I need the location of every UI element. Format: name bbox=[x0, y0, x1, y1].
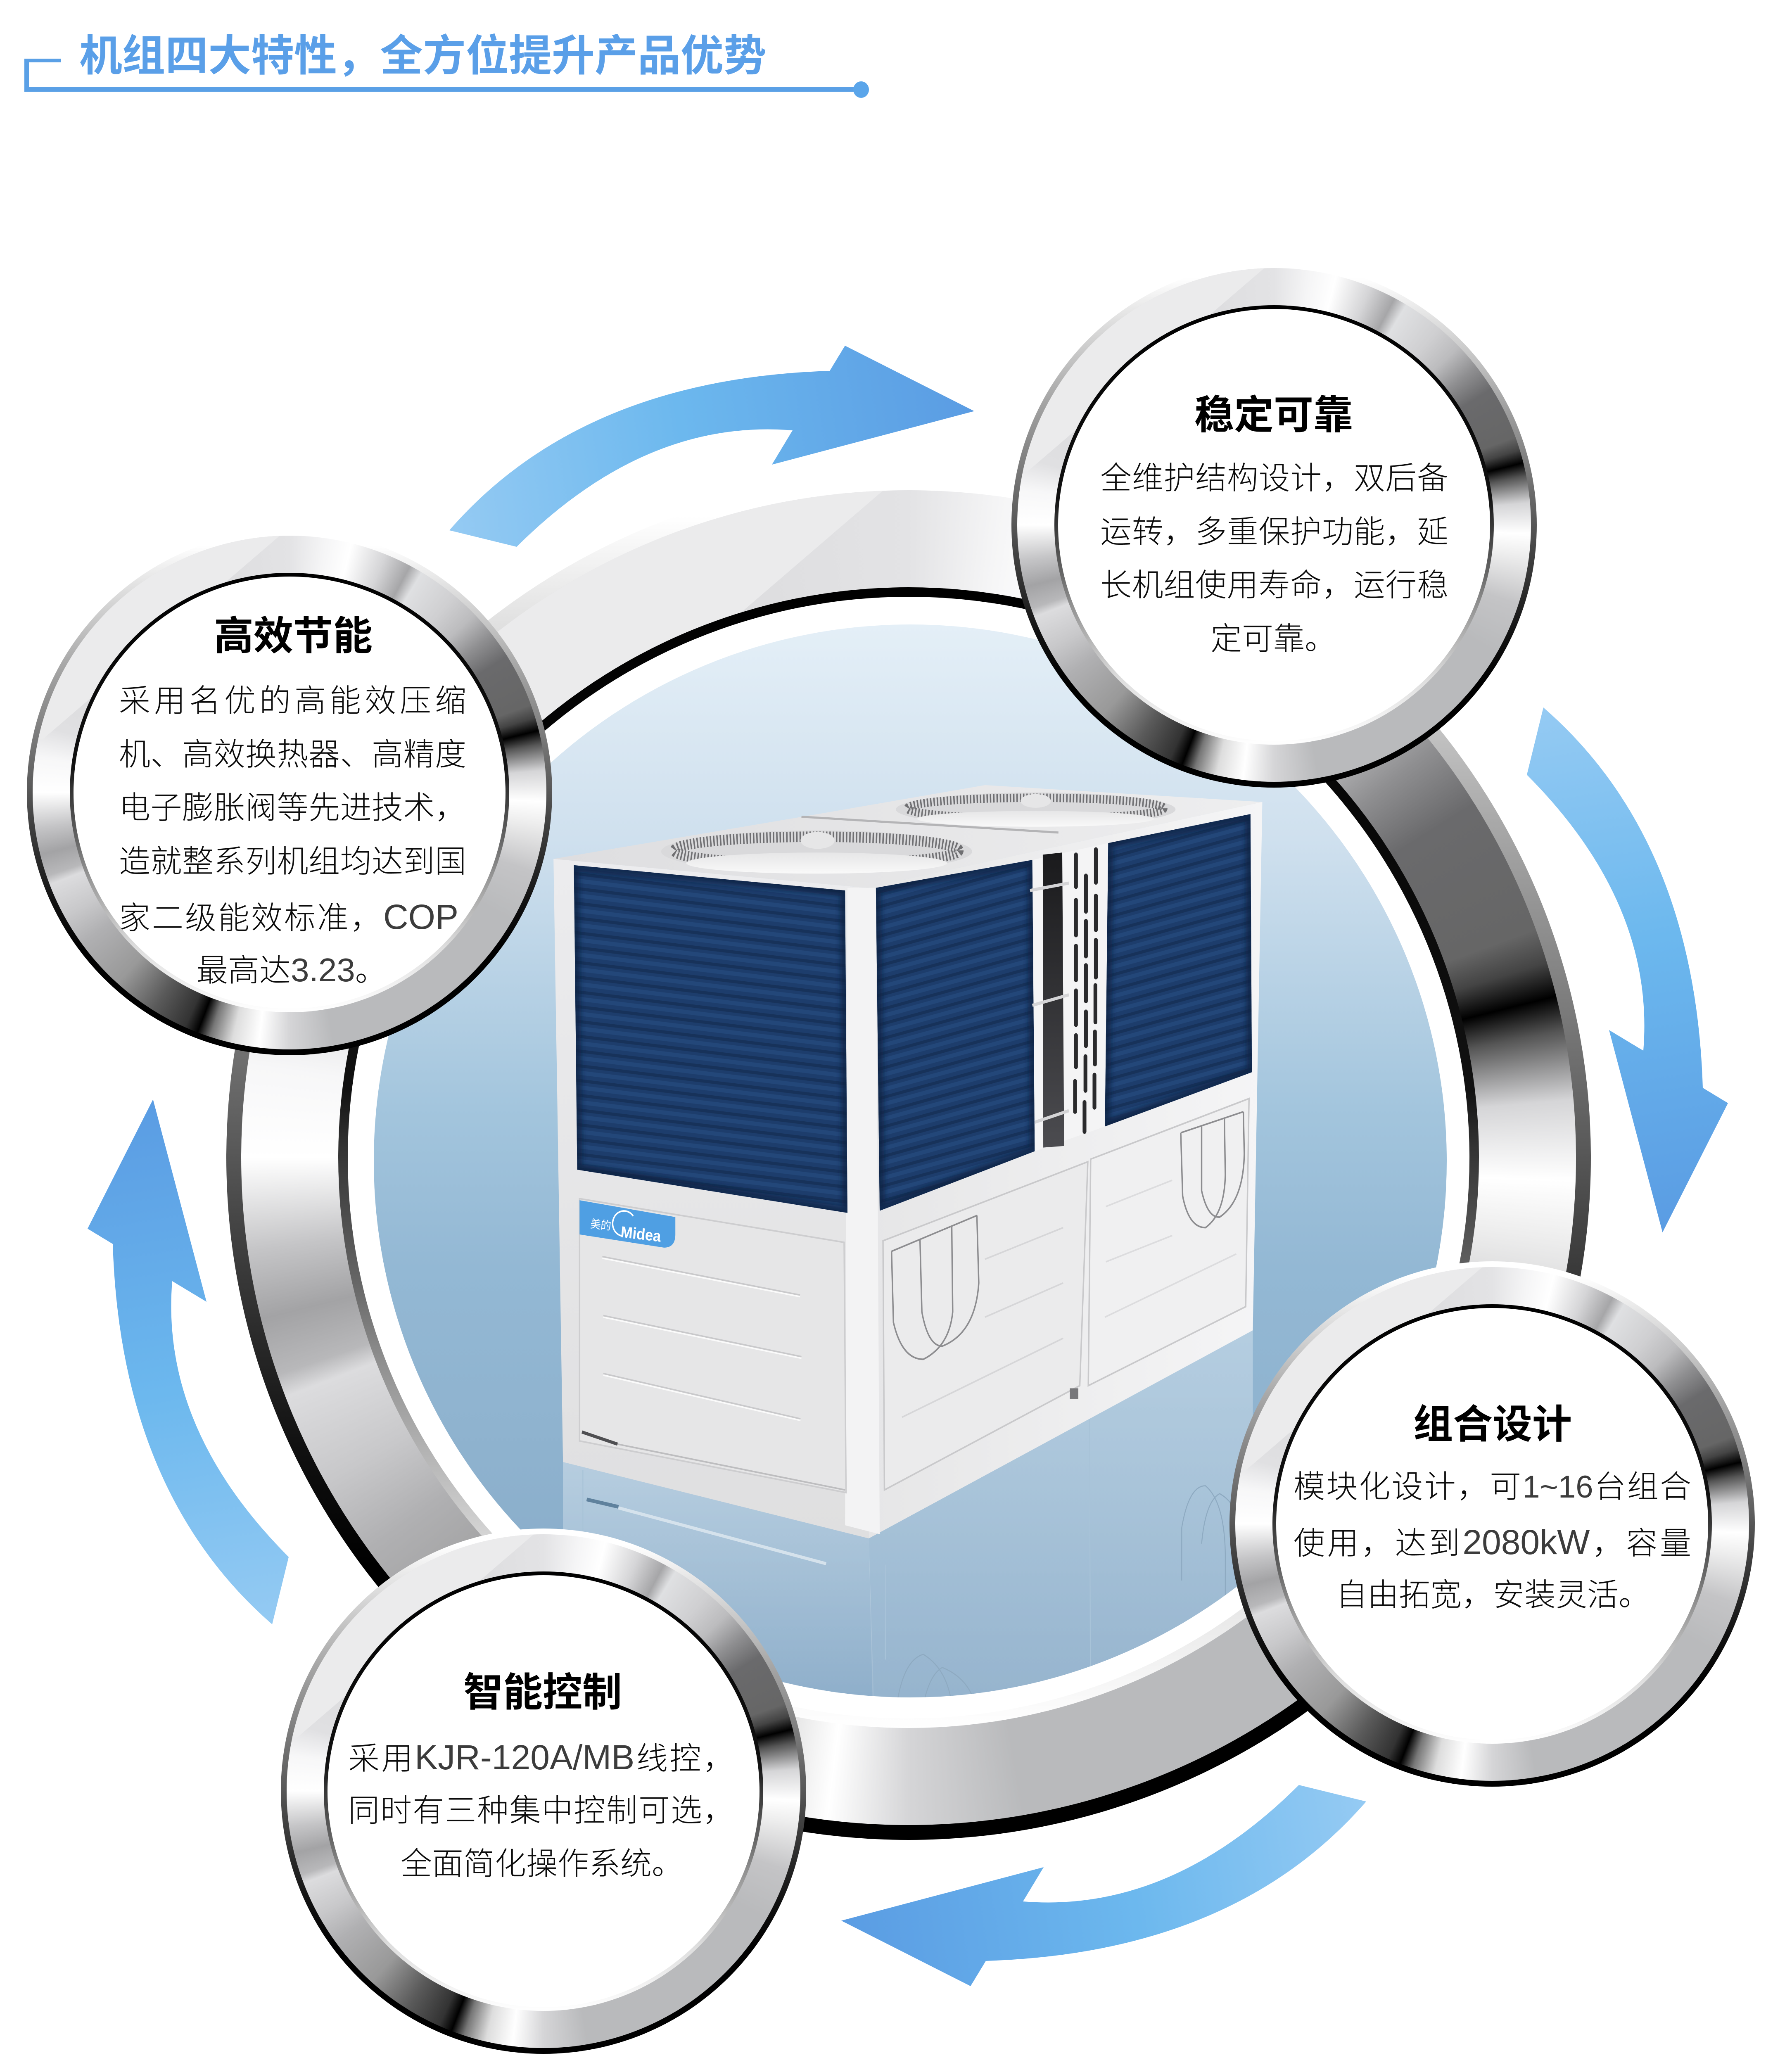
heading: 稳定可靠 bbox=[1194, 393, 1353, 437]
fan 1 bbox=[661, 831, 972, 873]
body text bbox=[281, 1529, 806, 2054]
coil right 2 bbox=[1105, 814, 1252, 1127]
heading: 组合设计 bbox=[1413, 1403, 1572, 1447]
arrow: left bbox=[88, 1099, 289, 1624]
logo badge bbox=[579, 1200, 675, 1248]
side panel 2 bbox=[1088, 1099, 1249, 1386]
panel: 智能控制 bbox=[281, 1529, 806, 2054]
top plate bbox=[553, 785, 1262, 888]
heading: 高效节能 bbox=[214, 614, 373, 658]
body text bbox=[1011, 262, 1537, 788]
product: air-cooled heat pump unit bbox=[553, 785, 1262, 1697]
body text: 长机组使用寿命，运行稳 bbox=[1100, 568, 1448, 603]
body text: 自由拓宽，安装灵活。 bbox=[1336, 1578, 1650, 1613]
large chrome ring bbox=[226, 475, 1591, 1840]
front door bbox=[579, 1199, 846, 1493]
corner post bbox=[845, 888, 880, 1534]
fan 2 bbox=[896, 793, 1175, 827]
body text: 造就整系列机组均达到国 bbox=[119, 844, 466, 879]
arrow: top bbox=[449, 346, 974, 547]
floor reflection bbox=[563, 1330, 1253, 1697]
blue central disc bbox=[374, 624, 1447, 1697]
title banner bbox=[0, 0, 876, 99]
logo badge: Midea bbox=[620, 1223, 662, 1245]
body text: 模块化设计，可1~16台组合 bbox=[1294, 1469, 1691, 1505]
coil left bbox=[574, 865, 847, 1213]
body text: 最高达3.23。 bbox=[197, 952, 387, 988]
panel: 稳定可靠 bbox=[1011, 262, 1537, 788]
body text: 使用，达到2080kW，容量 bbox=[1294, 1523, 1691, 1562]
arrow: bottom bbox=[841, 1785, 1366, 1986]
panel: 组合设计 bbox=[1229, 1261, 1755, 1787]
body text: 定可靠。 bbox=[1210, 622, 1336, 657]
body text: 全维护结构设计，双后备 bbox=[1100, 461, 1448, 496]
body text: 全面简化操作系统。 bbox=[401, 1847, 683, 1882]
title text: 机组四大特性，全方位提升产品优势 bbox=[79, 32, 767, 80]
logo badge: 美的 bbox=[590, 1217, 612, 1233]
heading bracket line with dot bbox=[0, 0, 876, 99]
heading: 智能控制 bbox=[463, 1671, 622, 1715]
body text: 机、高效换热器、高精度 bbox=[119, 737, 466, 772]
unit body bbox=[553, 785, 1262, 1538]
right face bbox=[866, 802, 1262, 1538]
panel: 高效节能 bbox=[27, 530, 552, 1055]
body text bbox=[27, 530, 552, 1055]
body text: 电子膨胀阀等先进技术， bbox=[119, 790, 466, 826]
body text: 运转，多重保护功能，延 bbox=[1100, 515, 1448, 550]
body text: 同时有三种集中控制可选， bbox=[348, 1793, 734, 1828]
centre service column bbox=[1030, 843, 1108, 1151]
body text: 采用名优的高能效压缩 bbox=[119, 684, 466, 719]
left face bbox=[553, 859, 869, 1538]
body text: 家二级能效标准，COP bbox=[119, 897, 458, 936]
arrow: right bbox=[1527, 707, 1728, 1232]
coil right 1 bbox=[876, 860, 1035, 1211]
side panel 1 bbox=[883, 1162, 1088, 1490]
body text bbox=[1229, 1261, 1755, 1787]
body text: 采用KJR-120A/MB线控， bbox=[348, 1738, 734, 1777]
